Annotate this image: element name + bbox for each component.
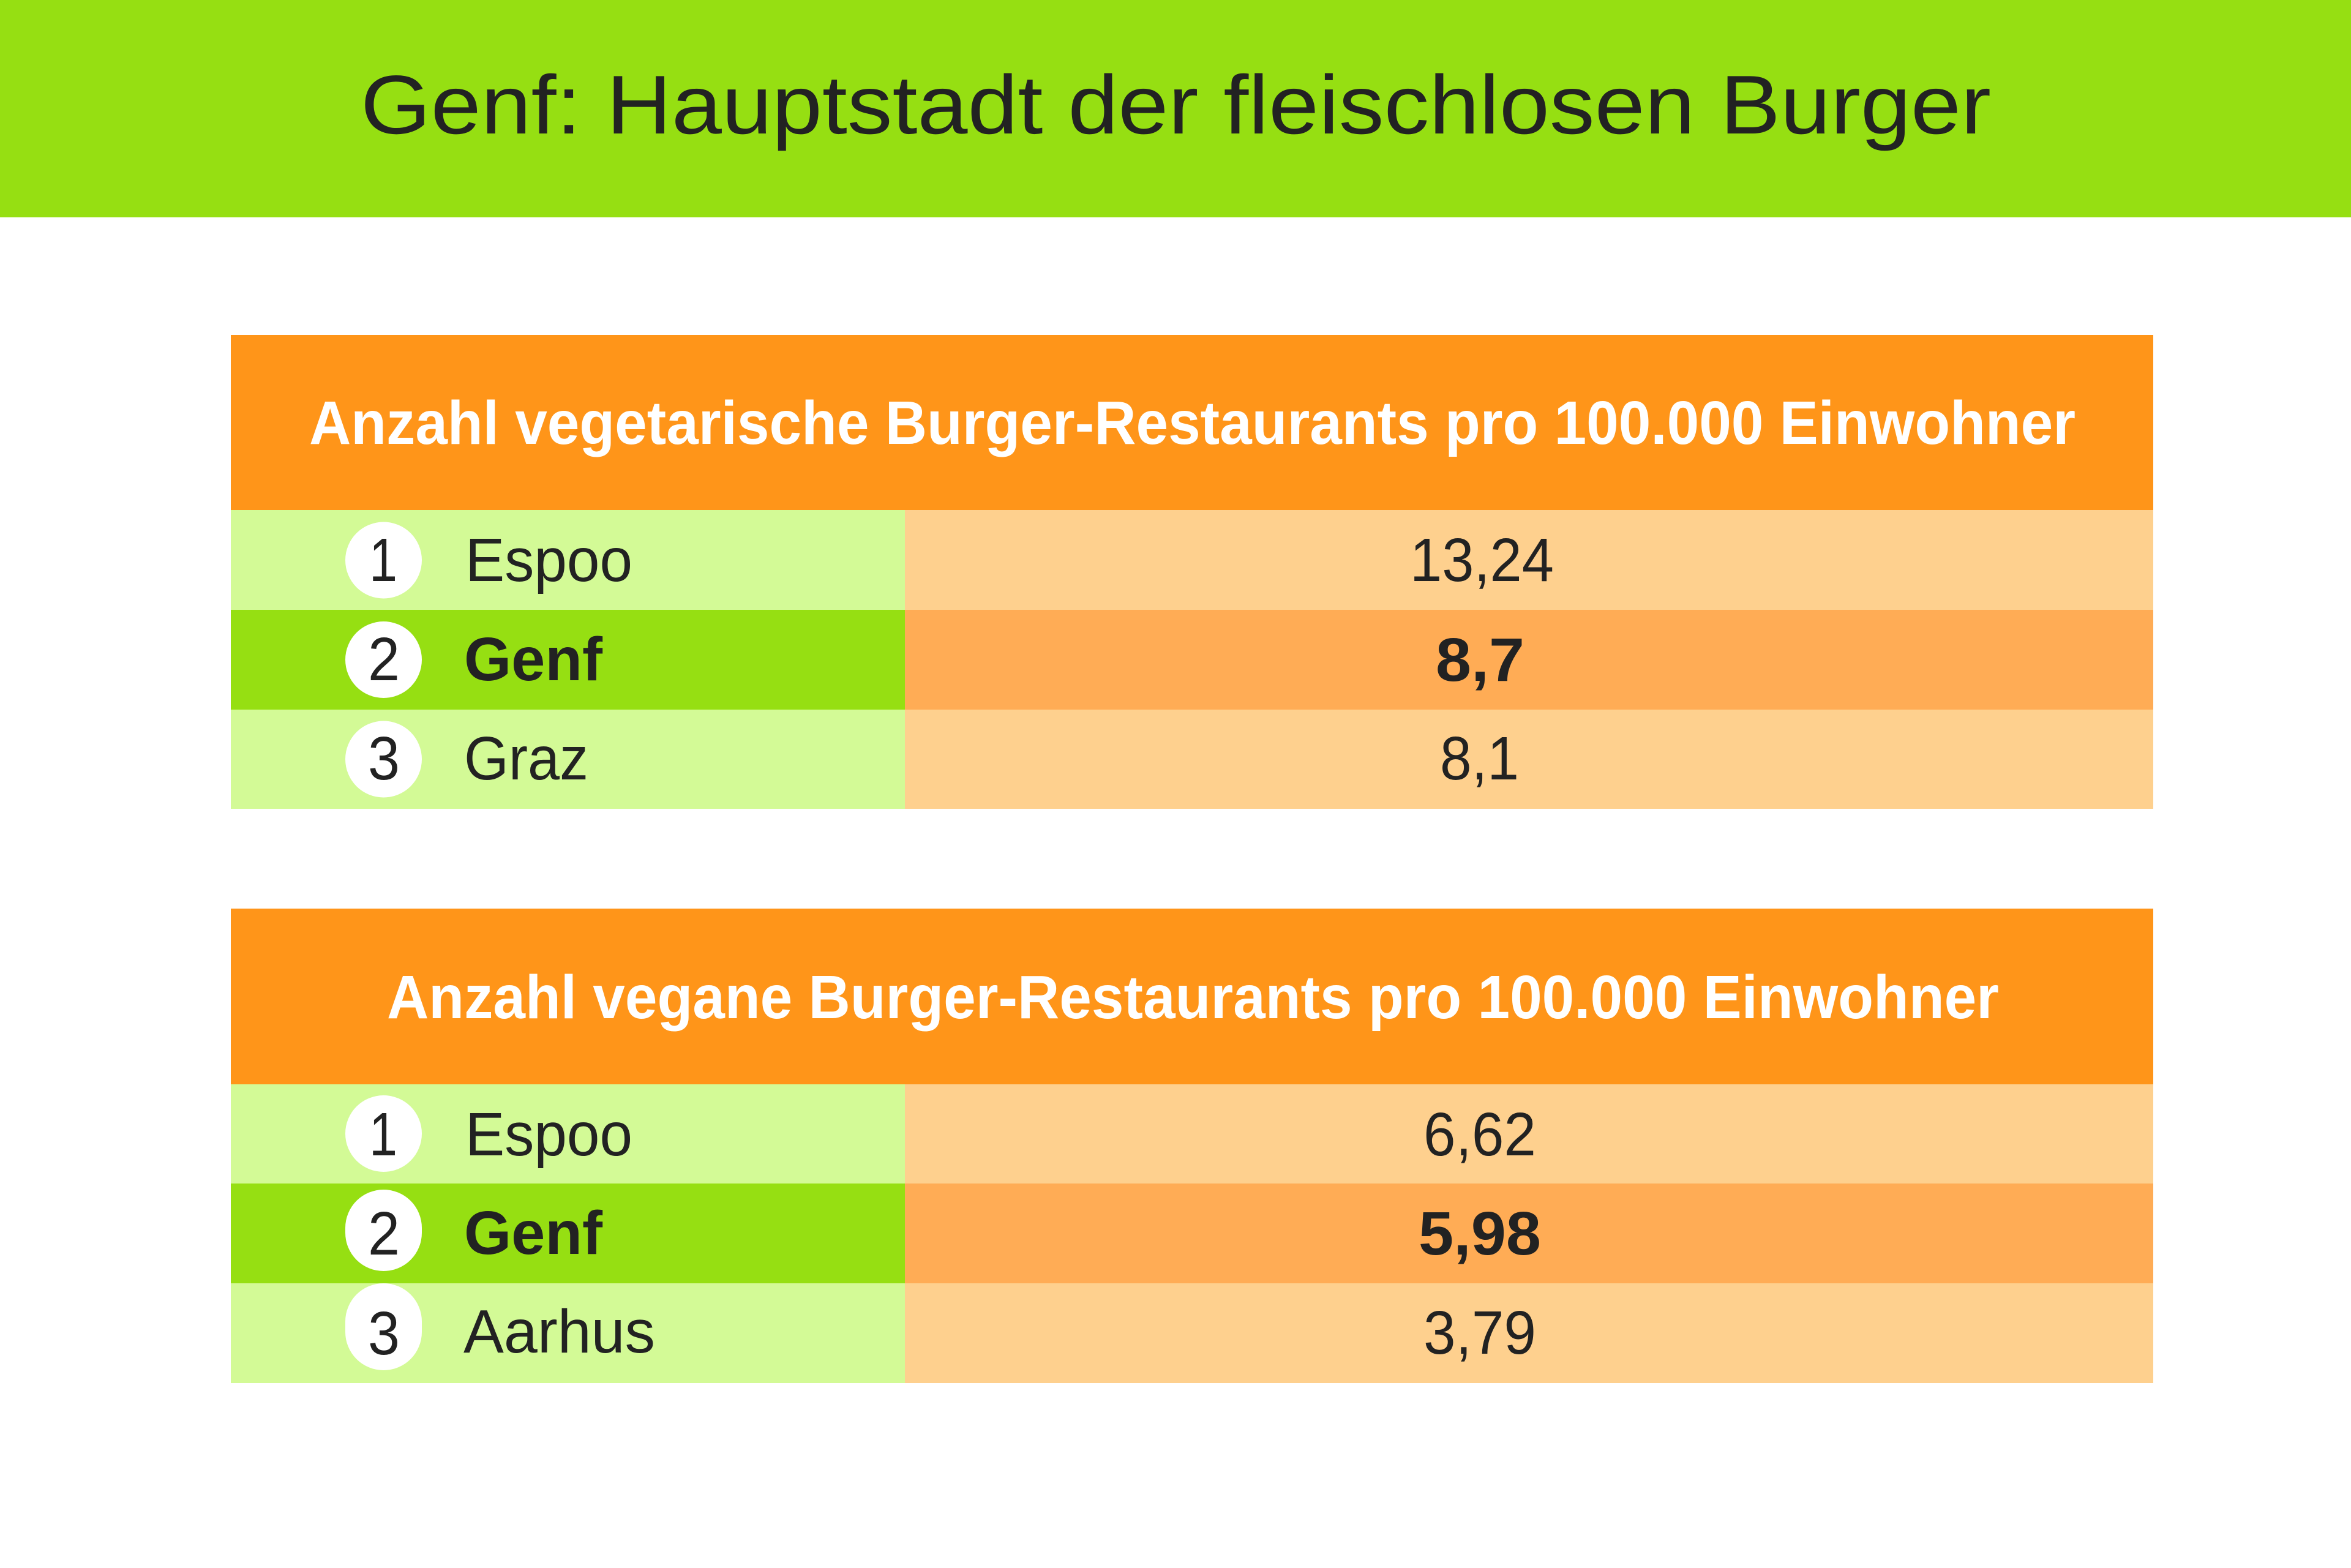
row 2: Genf 5,98: 2	[368, 1199, 400, 1268]
table heading: Anzahl vegane Burger-Restaurants pro 100.000 Einwohner	[387, 963, 1999, 1032]
row 1: Espoo 6,62: Espoo	[465, 1100, 632, 1169]
row 2: Genf 8,7: 8,7	[1436, 626, 1524, 694]
title banner	[0, 0, 2351, 217]
row 1: Espoo 6,62: 6,62	[1423, 1100, 1536, 1169]
row 2: Genf 8,7: Genf	[464, 625, 603, 694]
row 2: Genf 8,7	[231, 610, 2153, 710]
row 1: Espoo 13,24: 13,24	[1410, 526, 1554, 595]
title: Genf: Hauptstadt der fleischlosen Burger	[361, 58, 1991, 151]
row 3: Graz 8,1	[231, 710, 2153, 809]
row 3: Aarhus 3,79: Aarhus	[463, 1297, 655, 1366]
table heading: Anzahl vegetarische Burger-Restaurants pro 100.000 Einwohner	[309, 389, 2075, 457]
row 3: Graz 8,1: Graz	[464, 724, 588, 793]
row 1: Espoo 13,24	[231, 510, 2153, 610]
table heading	[231, 909, 2153, 1084]
row 2: Genf 8,7: 2	[368, 625, 400, 694]
row 1: Espoo 13,24: 1	[369, 526, 397, 595]
row 1: Espoo 6,62	[231, 1084, 2153, 1184]
panel: vegetarian burger restaurants table	[231, 335, 2153, 809]
row 2: Genf 5,98	[231, 1184, 2153, 1283]
row 3: Graz 8,1: 8,1	[1440, 724, 1519, 793]
table heading	[231, 335, 2153, 510]
row 1: Espoo 6,62: 1	[369, 1100, 397, 1169]
row 3: Aarhus 3,79: 3	[368, 1299, 400, 1368]
row 3: Graz 8,1: 3	[368, 724, 400, 793]
row 2: Genf 5,98: 5,98	[1419, 1199, 1541, 1268]
row 3: Aarhus 3,79: 3,79	[1423, 1299, 1536, 1367]
panel: vegan burger restaurants table	[231, 909, 2153, 1383]
row 2: Genf 5,98: Genf	[464, 1199, 603, 1267]
row 1: Espoo 13,24: Espoo	[465, 526, 632, 595]
row 3: Aarhus 3,79	[231, 1283, 2153, 1383]
